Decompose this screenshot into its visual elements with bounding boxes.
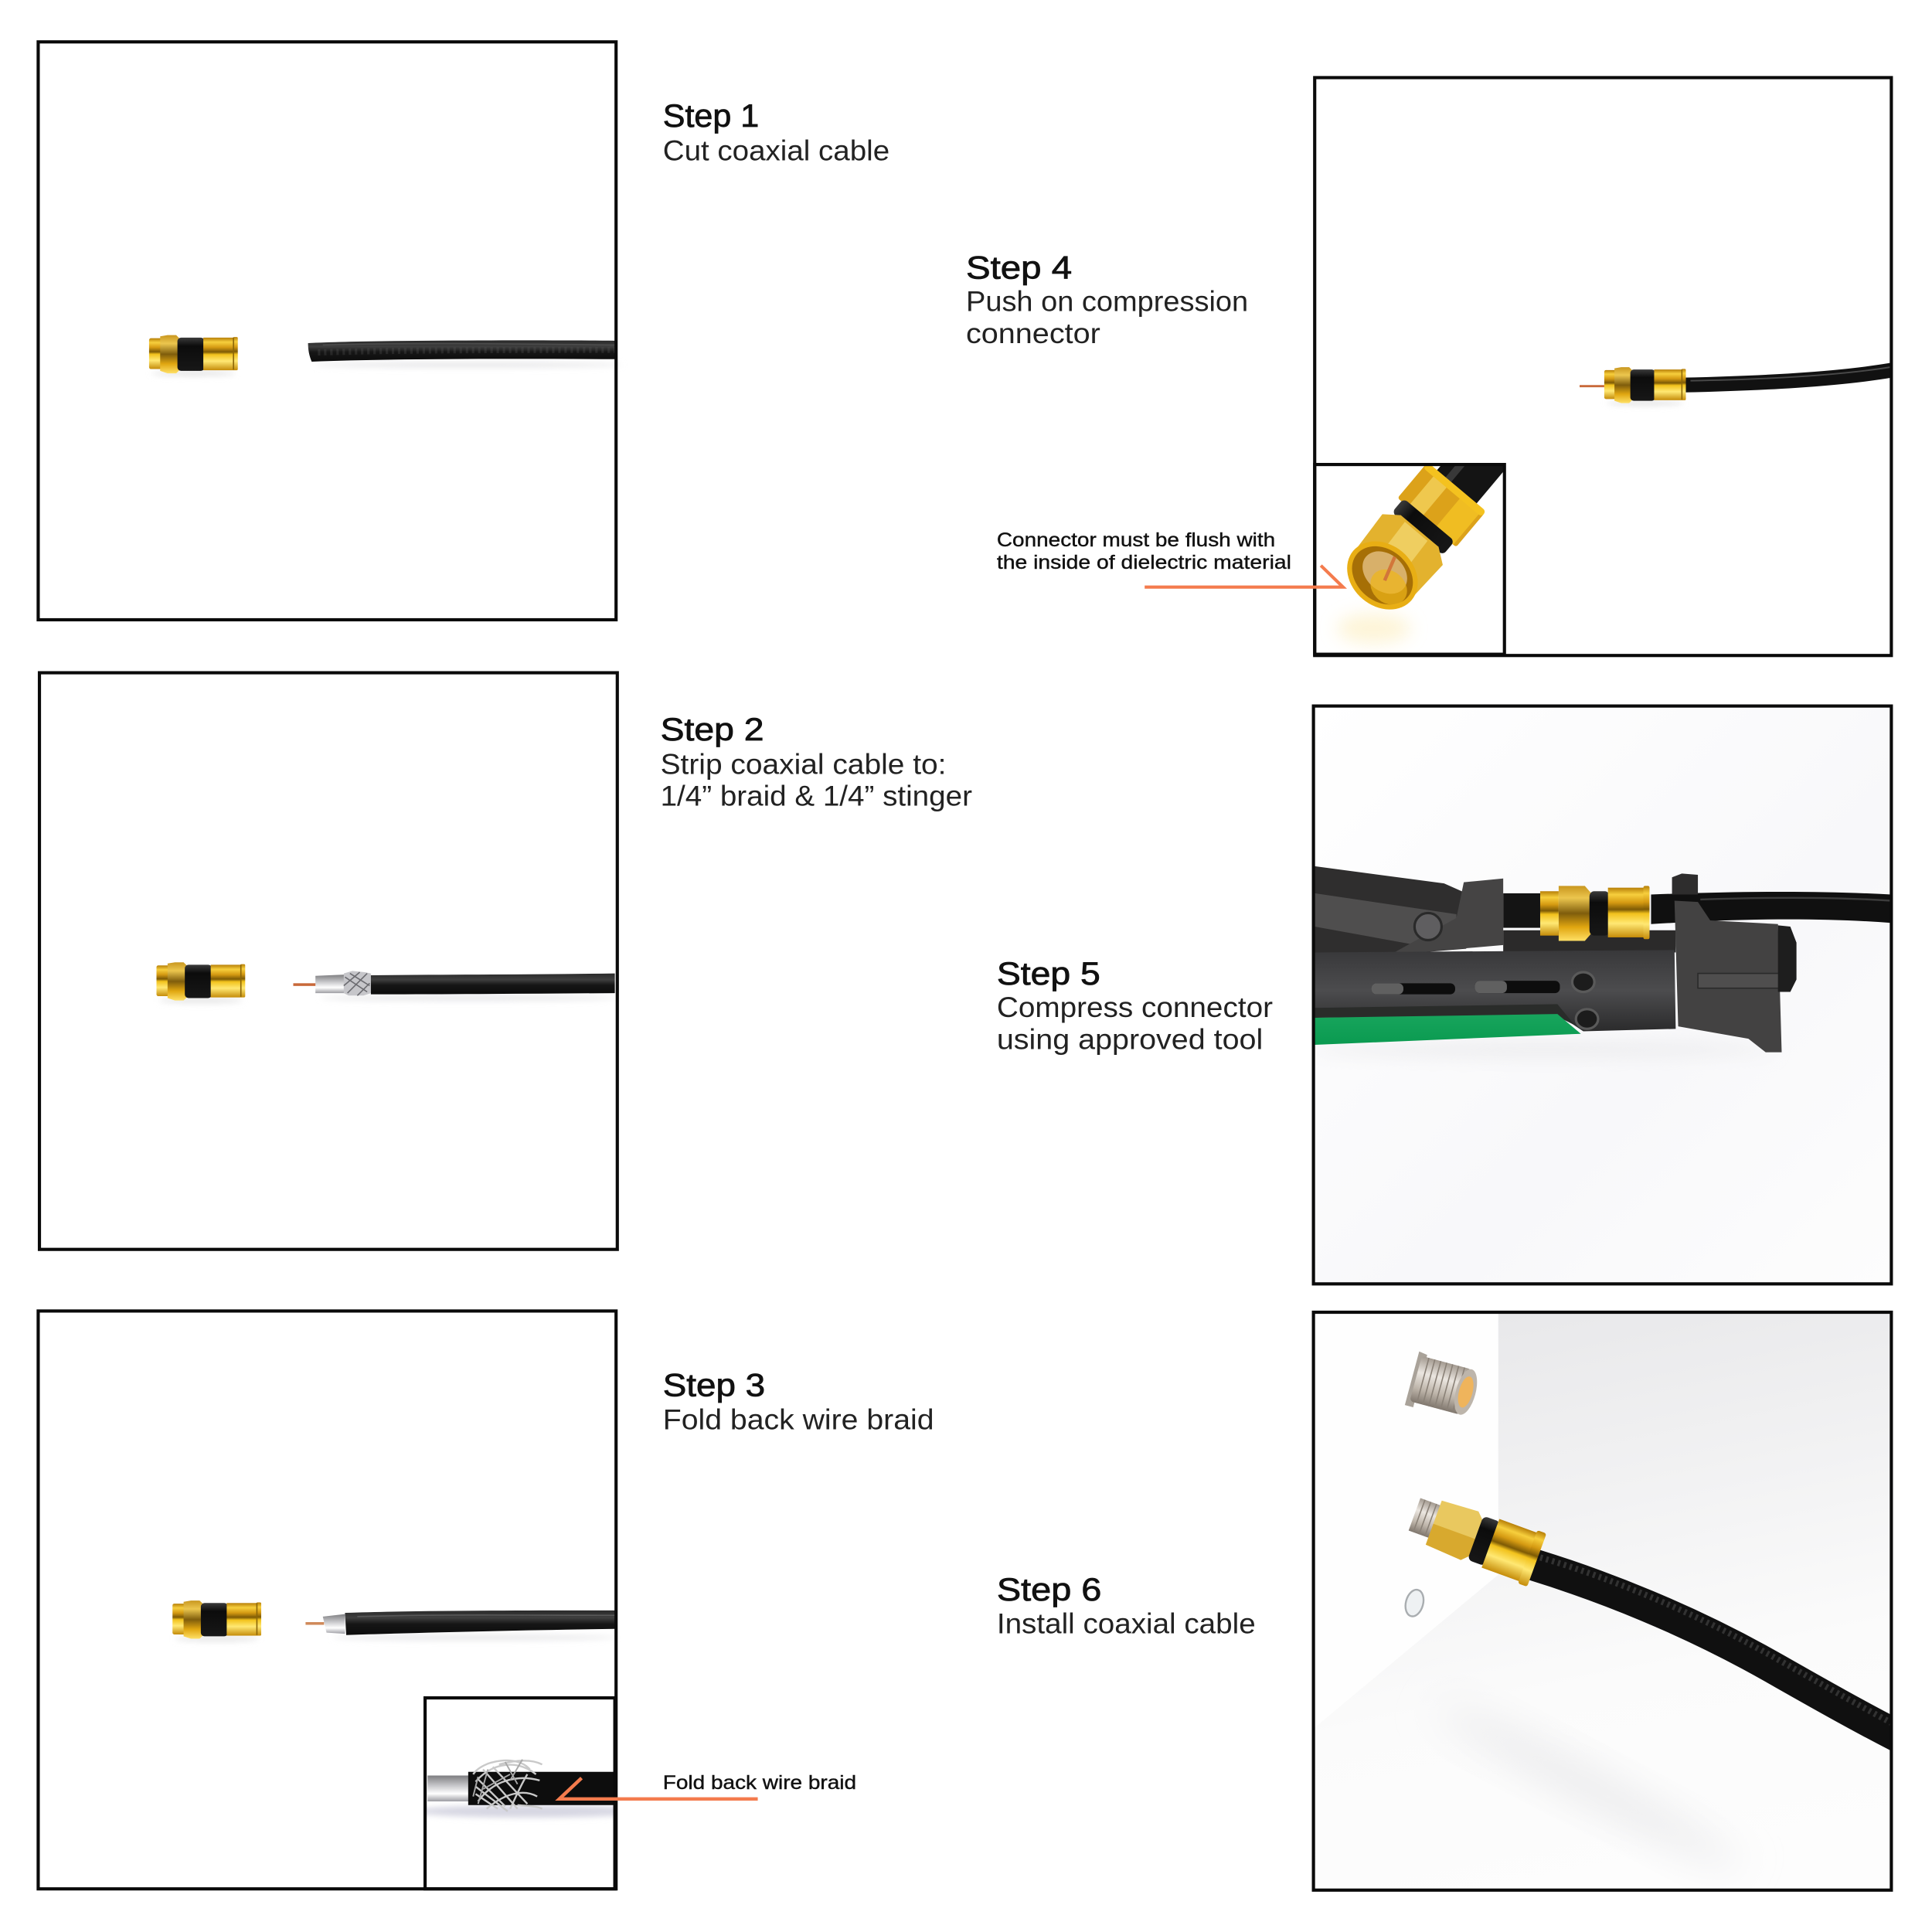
heading: Step 2: Step 2 [661,711,764,747]
arrow: orange pointer to connector [1145,566,1343,587]
heading: Step 6: Step 6 [997,1571,1101,1607]
text: step 1 description: Cut coaxial cable [663,134,889,166]
text: step 2 description: 1/4” braid & 1/4” stinger [661,781,972,812]
text: step 5 description: using approved tool [997,1024,1263,1056]
text: step 2 description [661,748,972,812]
text: step 4 description: connector [966,318,1100,349]
panel: step 3 photo [38,1311,647,1889]
icon: gold compression connector [156,962,245,1003]
icon: silver F connector port [1405,1351,1478,1415]
callout: connector must be flush [997,530,1291,573]
heading: Step 3: Step 3 [663,1366,765,1403]
callout: connector must be flush: the inside of dielectric material [997,553,1291,573]
floor shadow smudge [1487,1729,1698,1847]
text: step 6 description: Install coaxial cable [997,1607,1256,1639]
assembled connector on cable [1580,367,1891,406]
panel: step 5 photo [1306,706,1891,1284]
inset: connector close-up [1313,463,1506,656]
panel: step 4 photo [1315,77,1891,655]
panel: step 2 photo [39,673,617,1250]
text: step 2 description: Strip coaxial cable to: [661,748,946,780]
coaxial cable cut end [308,340,622,367]
arrow: orange pointer to braid [560,1778,758,1799]
callout: fold back wire braid: Fold back wire braid [663,1773,856,1794]
cable [1534,1565,1897,1736]
mounting hole [1405,1589,1425,1617]
callout: connector must be flush: Connector must be flush with [997,530,1275,551]
icon: gold connector in tool [1540,886,1649,941]
compression tool [1306,866,1891,1057]
text: step 4 description: Push on compression [966,286,1248,318]
cable with folded braid [305,1611,616,1640]
text: step 4 description [966,286,1248,349]
icon: gold compression connector [172,1600,261,1641]
icon: installed gold connector [1408,1498,1546,1586]
heading: Step 5: Step 5 [997,955,1100,992]
wall plate [1315,1314,1498,1635]
text: step 5 description: Compress connector [997,992,1273,1023]
panel: step 1 photo [38,42,622,620]
panel: step 6 photo [1314,1312,1897,1890]
heading: Step 1: Step 1 [663,97,759,134]
stripped coaxial cable [293,971,616,1001]
inset: braid close-up [423,1696,617,1890]
heading: Step 4: Step 4 [966,249,1072,285]
text: step 3 description: Fold back wire braid [663,1403,934,1435]
text: step 5 description [997,992,1273,1056]
icon: gold compression connector [149,335,238,376]
